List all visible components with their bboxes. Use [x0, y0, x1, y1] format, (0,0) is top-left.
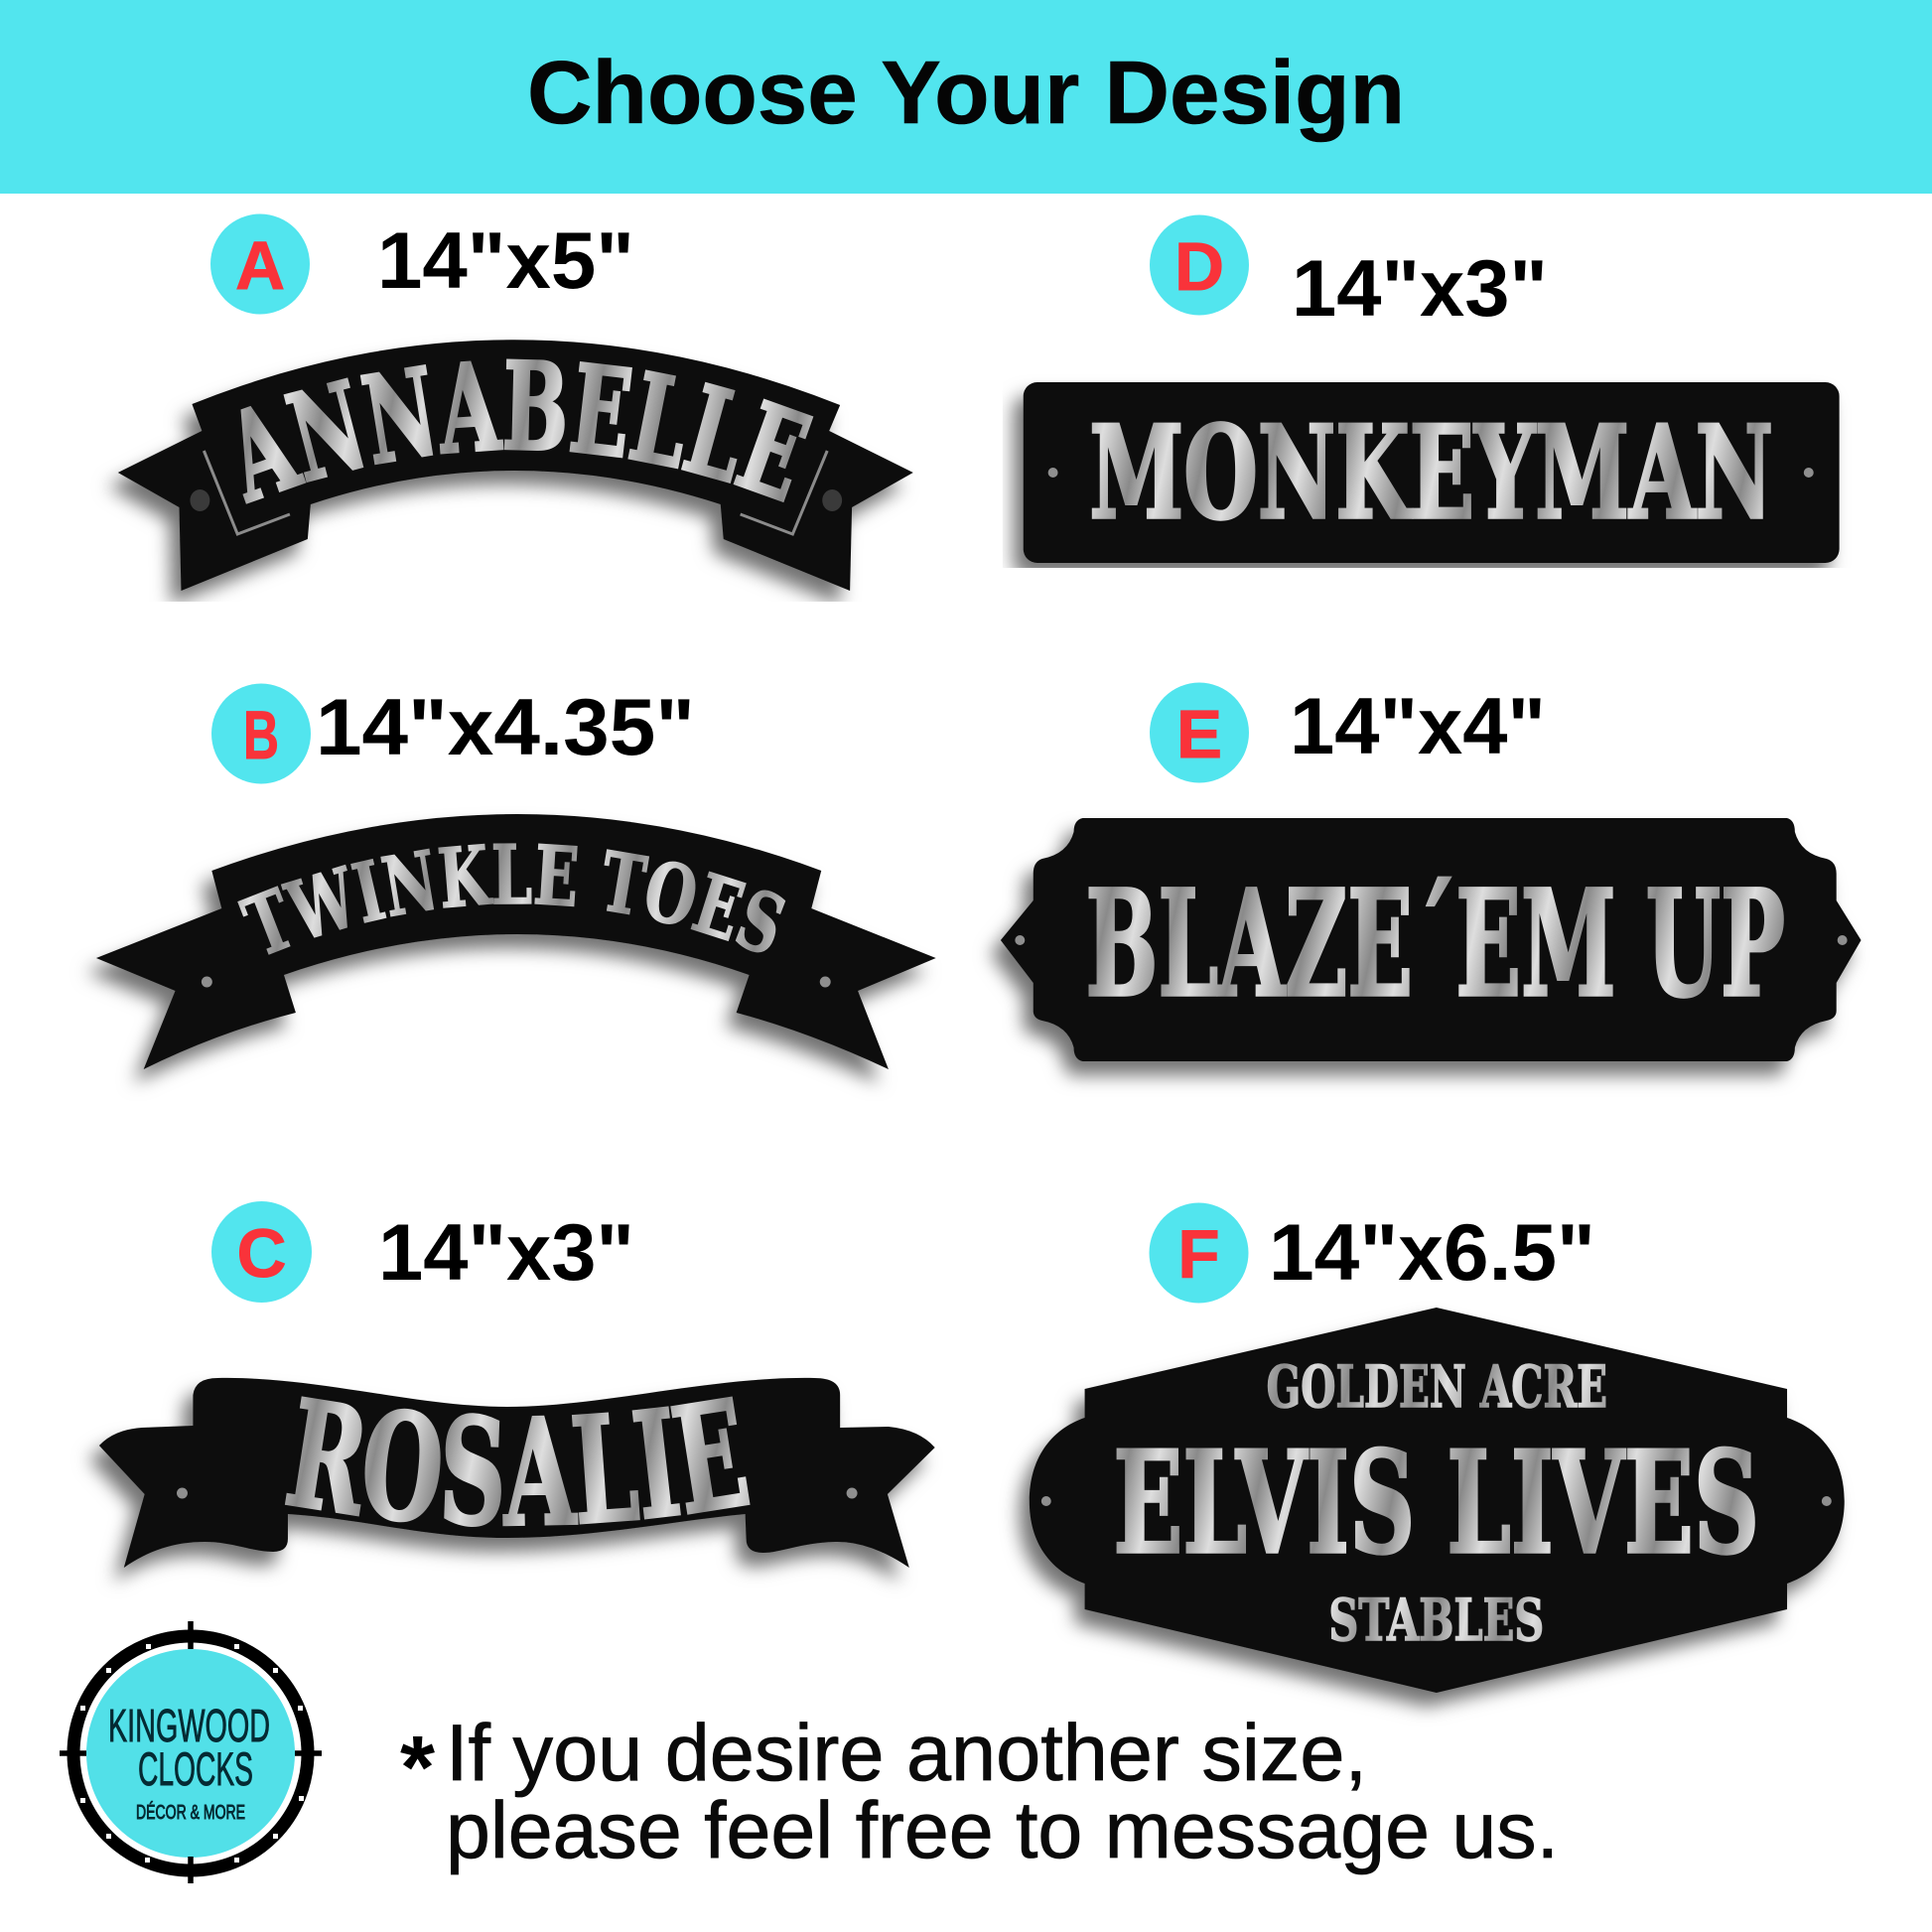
size E: 14"x4": [1290, 682, 1546, 771]
sign E: notched plate: [1001, 818, 1862, 1061]
sign D: rounded plate: [1024, 382, 1840, 563]
footer note: If you desire another size,: [446, 1709, 1367, 1798]
logo: KingWood Clocks: CLOCKS: [138, 1742, 253, 1795]
badge D: D: [1174, 228, 1224, 305]
panel: design B: [81, 683, 935, 1090]
badge D: [1150, 214, 1249, 316]
logo: KingWood Clocks: [60, 1621, 322, 1883]
sign A: arched banner: ANNABELLE: [240, 359, 814, 504]
badge A: A: [235, 227, 285, 304]
size D: 14"x3": [1292, 244, 1548, 334]
title: Choose Your Design: [527, 44, 1405, 143]
panel: design F: [1030, 1203, 1845, 1693]
badge C: C: [237, 1215, 286, 1292]
badge F: [1150, 1203, 1249, 1303]
sign B: arched banner: TWINKLE TOES: [237, 843, 786, 955]
size B: 14"x4.35": [316, 683, 695, 772]
footer note: *: [400, 1719, 435, 1818]
sign C: wavy ribbon: ROSALIE: [284, 1396, 751, 1527]
badge B: B: [243, 697, 279, 773]
size F: 14"x6.5": [1269, 1208, 1595, 1298]
sign B: arched banner: [81, 814, 935, 1090]
badge E: [1150, 683, 1249, 782]
size C: 14"x3": [378, 1208, 634, 1298]
sign C: wavy ribbon: [81, 1378, 935, 1588]
size A: 14"x5": [377, 216, 634, 306]
badge B: [211, 683, 311, 784]
panel: design E: [1001, 682, 1862, 1061]
footer note: please feel free to message us.: [446, 1786, 1559, 1875]
sign F: hexagonal plaque: STABLES: [1328, 1587, 1544, 1654]
badge A: [210, 214, 310, 314]
badge F: F: [1177, 1216, 1220, 1293]
logo: KingWood Clocks: DÉCOR & MORE: [136, 1801, 245, 1824]
sign F: hexagonal plaque: [1030, 1308, 1845, 1693]
badge E: E: [1176, 696, 1222, 772]
sign A: arched banner: [102, 340, 913, 602]
badge C: [211, 1201, 312, 1303]
panel: design D: [1024, 214, 1840, 563]
panel: design C: [81, 1201, 935, 1588]
header band: [0, 0, 1932, 194]
footer note: [400, 1709, 1559, 1875]
logo: KingWood Clocks: KINGWOOD: [108, 1700, 270, 1751]
sign F: hexagonal plaque: GOLDEN ACRE: [1267, 1353, 1607, 1421]
panel: design A: [102, 214, 913, 602]
